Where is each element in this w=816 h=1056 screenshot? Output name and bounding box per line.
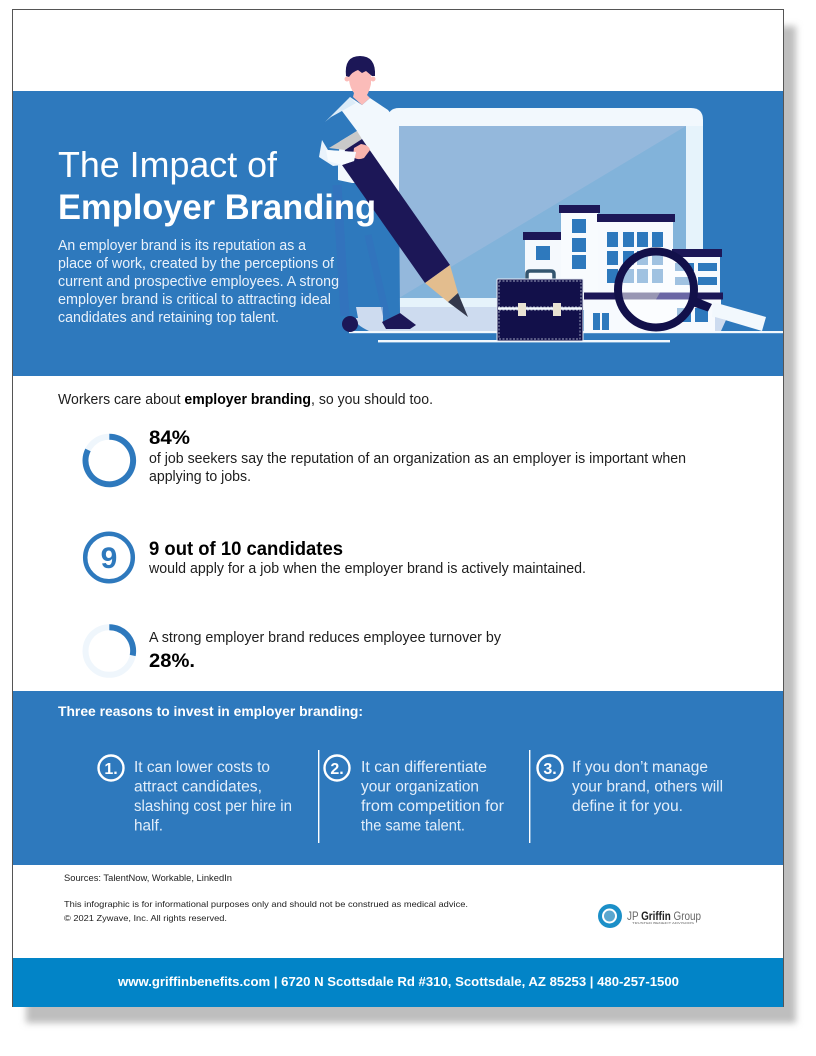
icon: magnifying glass <box>618 252 766 331</box>
reason 2: from competition for <box>361 798 504 815</box>
sources: Sources: TalentNow, Workable, LinkedIn <box>64 873 232 884</box>
stat: 9 out of 10: 9 out of 10 candidates <box>149 539 343 560</box>
stat: 28% <box>149 630 502 672</box>
disclaimer <box>64 899 468 923</box>
disclaimer: © 2021 Zywave, Inc. All rights reserved. <box>64 913 227 923</box>
icon: 28% donut <box>86 627 133 675</box>
reason 2 <box>324 756 504 834</box>
reason 3 <box>538 756 723 815</box>
icon: 84% donut <box>86 437 133 484</box>
intro paragraph <box>58 237 339 326</box>
panel: three reasons <box>13 691 783 865</box>
intro paragraph: place of work, created by the perceptions of <box>58 255 335 272</box>
reason 1: It can lower costs to <box>134 759 270 776</box>
illustration: ground lines <box>349 331 783 342</box>
reason 1: 1. <box>104 761 118 778</box>
disclaimer: This infographic is for informational purposes only and should not be construed as medical advice. <box>64 899 468 909</box>
reason 3: If you don’t manage <box>572 759 708 776</box>
intro paragraph: An employer brand is its reputation as a <box>58 237 307 254</box>
illustration: laptop screen <box>356 108 703 331</box>
footer bar <box>13 958 783 1007</box>
title: The Impact of <box>58 144 278 185</box>
reason 2: It can differentiate <box>361 759 487 776</box>
stat: 84%: applying to jobs. <box>149 469 251 485</box>
reason 1: half. <box>134 818 163 834</box>
logo: JP Griffin Group <box>598 904 701 928</box>
icon: number 9 ring <box>85 534 133 581</box>
icon: number 9 ring: 9 <box>101 542 117 575</box>
reason 3: 3. <box>543 761 557 778</box>
illustration: buildings <box>523 205 723 332</box>
intro paragraph: current and prospective employees. A strong <box>58 273 339 290</box>
reason 3: your brand, others will <box>572 778 723 796</box>
title <box>58 144 376 227</box>
reason 2: 2. <box>330 761 344 778</box>
reason 3: define it for you. <box>572 798 683 815</box>
reason 1: attract candidates, <box>134 778 262 796</box>
divider 1 <box>318 750 319 843</box>
stat: 28%: 28%. <box>149 651 195 672</box>
title: Employer Branding <box>58 188 376 227</box>
logo: JP Griffin Group: TRUSTED BENEFIT ADVISORS <box>632 921 694 925</box>
logo: JP Griffin Group: JP Griffin Group <box>627 909 701 923</box>
icon: briefcase <box>497 271 583 341</box>
illustration: pencil <box>319 111 468 317</box>
hero banner <box>13 91 783 376</box>
reason 1 <box>98 756 292 834</box>
stat: 9 out of 10 <box>148 539 586 577</box>
section lead: Workers care about employer branding, so you should too. <box>58 391 433 408</box>
reasons heading: Three reasons to invest in employer branding: <box>58 704 363 719</box>
intro paragraph: candidates and retaining top talent. <box>58 309 279 326</box>
intro paragraph: employer brand is critical to attracting ideal <box>58 291 331 308</box>
stat: 9 out of 10: would apply for a job when the employer brand is actively maintained. <box>148 561 586 577</box>
stat: 28%: A strong employer brand reduces employee turnover by <box>149 630 502 646</box>
divider 2 <box>529 750 530 843</box>
reason 2: the same talent. <box>361 818 465 834</box>
stat: 84%: 84% <box>149 428 190 449</box>
footer contact line: www.griffinbenefits.com | 6720 N Scottsdale Rd #310, Scottsdale, AZ 85253 | 480-257-1500 <box>117 974 679 989</box>
reason 2: your organization <box>361 778 479 796</box>
stat: 84% <box>149 428 686 485</box>
illustration: person <box>325 56 416 332</box>
reason 1: slashing cost per hire in <box>134 798 292 815</box>
stat: 84%: of job seekers say the reputation of an organization as an employer is important when <box>149 451 686 467</box>
